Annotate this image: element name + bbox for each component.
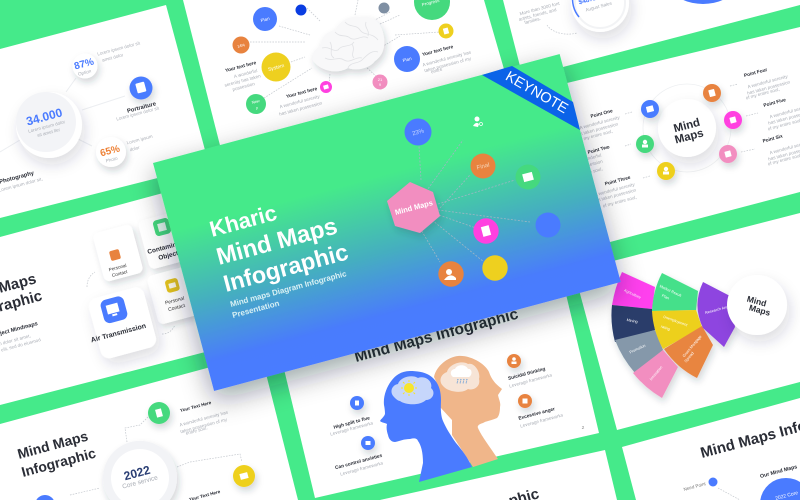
text: your text here right: taken possession of my [424,56,472,73]
ring: 2022: 2022 [122,463,152,483]
text: point four [743,67,791,100]
stat 87%: amet dolor [101,52,124,63]
panel: sales slide top right [503,0,800,76]
arrow: dashed curve [547,25,577,34]
node: orange people [438,261,464,287]
node: magenta icon [473,218,499,244]
text: font artists: families. [524,16,541,25]
subtitle: Presentation [231,299,280,320]
connectors [419,140,530,262]
centre circle: mind maps: Maps [674,127,705,147]
node: pink [372,74,388,90]
circle: mind maps: Maps [748,302,772,318]
icon: magenta point [724,111,742,129]
text: point five [763,97,800,131]
text: font artists: artists, friends, and [518,7,557,22]
panel: 2022 core service slide [0,354,298,500]
text: your text here left: possession [232,81,256,92]
text: your text here bottom: Your text here [286,86,318,100]
text: your text here top: Your Text Here [180,400,212,413]
icon: suicidal [507,354,521,368]
keynote ribbon: KEYNOTE [502,69,571,117]
heading [16,428,98,480]
wedge labels: Innovation [649,365,663,381]
node: yellow [438,24,454,38]
text: point five: Point Five [763,97,787,109]
card: personal contact top [92,224,144,282]
icon: pink point [719,145,737,163]
text: excessive anger [518,406,564,429]
text: point one: Point One [590,108,614,120]
text: font artists: More than 3000 font [519,1,561,16]
wedge labels: Promotion [629,344,646,355]
node: new [246,94,266,114]
card: contaminated object: Object [158,250,180,262]
text: point one: has taken possession [575,121,619,138]
wedge labels: Market Result [659,284,683,298]
wedge labels: Gross Mortgage [682,335,703,358]
panel: main cover slide [153,54,621,391]
icon: anger [518,394,532,408]
node: plan [253,7,277,31]
node: final: Final [476,162,490,172]
label: our mind maps: Our Mind Maps [759,464,798,480]
icon: sun cloud [391,376,433,404]
text: can control: Leverage frameworks [340,460,384,477]
card: air transmission [87,286,158,360]
circle: mind maps [727,275,787,335]
text: point six: Point Six [762,133,784,145]
node: 14%: 14% [237,42,246,49]
text: point four: has taken possession [747,79,791,96]
node: plan: Plan [260,16,271,23]
node: new: New [251,98,260,105]
text: high split: High split to five [333,415,371,431]
hexagon: mind maps [387,182,440,233]
text: excessive anger: Excessive anger [518,406,556,422]
wedge labels: Plan [661,294,670,301]
card: contaminated object: Contaminated [147,238,190,256]
stat 65%: Lorem ipsum [126,134,153,145]
text: can control: Can control anxieties [335,453,383,471]
central circle 34.000: sit amet ller [37,127,61,138]
text: high split: Leverage frameworks [330,420,374,437]
main title [207,200,351,297]
text: point two: entire soul, [580,166,603,177]
icon: green point [636,135,654,153]
text: your text here right: entire [430,67,443,74]
node: blue [536,212,560,238]
node: pink: 21 [378,77,383,82]
text: point three: A wonderful serenity [594,182,636,197]
heading: Mind Maps [16,428,90,462]
text: your text here right: Your text here [422,44,454,58]
text: your text here right [422,44,472,74]
stat 87%: Option [77,68,92,77]
circle: mind maps: Mind [746,294,768,308]
text: your text here right: A wonderful serenity has [422,49,472,67]
text: point two: wonderful [581,153,602,163]
wedge labels: Agriculture [623,288,641,300]
text: your text here left: Your text here [225,60,257,74]
node: yellow [482,255,508,281]
text: your text here top: entire soul. [185,425,208,436]
ring: august sales: August Sales [585,0,613,12]
icon: brain [313,16,384,71]
panel: bottom right slide [622,398,800,500]
wedge labels: Mining [626,318,638,324]
text: your text here bottom [279,86,323,117]
panel: stats slide top left [0,5,209,218]
node: new: y [256,105,258,110]
card: personal contact top: Contact [111,269,129,278]
text: your text here top: A wonderful serenity has [179,409,229,427]
node: need point: Need Point [683,481,707,492]
stat 65%: Photo [105,155,118,164]
text: your text here left: A wonderful [233,68,258,79]
stat 87%: Lorem ipsum dolor sit [97,40,141,57]
text: suicidal thinking: Suicidal thinking [507,366,546,382]
text: point one: A wonderful serenity [579,115,621,130]
node: magenta [320,81,332,93]
card: personal contact right: Personal [164,296,185,306]
icon: green [148,402,170,424]
central circle 34.000: Lorem ipsum dolor [28,119,66,134]
chart: fan wedges [611,272,735,398]
text: point two: Point Two [587,144,610,156]
node: green icon [516,164,540,190]
text: point two [576,144,610,177]
text: point one: of my entire soul, [578,129,613,142]
icon: portraiture [116,76,160,122]
heading: Infographic [20,445,98,480]
icon: portraiture: Lorem ipsum dolor sit [116,105,160,122]
node: plan right: Plan [402,56,413,63]
text: point three [593,175,637,208]
main title: Mind Maps [214,213,340,271]
text: point two: n possession [576,159,604,170]
wedge labels: Spread [684,351,695,363]
node: need point [683,478,740,500]
node: system [262,52,290,82]
text: point three: has taken possession [593,187,637,204]
wedge labels: Research And [705,305,729,315]
text: point four: Point Four [743,67,768,79]
text: point four: of my entire soul, [745,87,780,100]
icon: rain cloud [440,362,479,392]
text: point six [762,133,800,166]
icon: blue [36,495,54,500]
text: your text here left: serenity has taken [224,73,262,88]
icon: user search [473,116,482,127]
node: 14% [232,36,250,54]
wedge labels: rating [660,325,670,332]
text: point three: Point Three [604,175,632,187]
text: your text here bottom: has taken possession [279,100,323,117]
node: 23%: 23% [412,128,425,137]
illustration: blue head [380,371,472,482]
page number: 2 [582,425,585,431]
card: personal contact right: Contact [168,303,186,313]
icon: yellow point [657,162,675,180]
node: progress [414,0,450,20]
text: object mindmaps [0,321,42,359]
subtitle: Mind maps Diagram Infographic [229,269,348,309]
icon: blue point [641,100,659,118]
heading: Mind Maps Infographic [353,306,520,366]
node: 23% [404,118,432,146]
node: plan right [394,46,420,72]
ring: 2022 [103,441,177,500]
text: suicidal thinking [507,366,553,389]
stat 87% [72,40,141,78]
node: system: System [267,63,285,73]
ring: 2022: Core service [122,474,159,491]
stat 65%: dolor [129,145,141,152]
stat 65%: 65% [99,144,121,159]
panel: mind maps point slide right [540,27,800,242]
circle: core [760,478,800,500]
icon: orange point [703,84,721,102]
node: pink: 9 [379,82,382,87]
illustration: tan head [434,356,502,467]
text: your text here top [179,400,229,436]
icon: portraiture: Portraiture [127,101,158,115]
text: point four: A wonderful serenity [747,74,789,89]
wedge labels: Unemployment [663,315,689,328]
main title: Infographic [221,239,351,297]
text: your text here bottom: A wonderful serenity [279,94,321,109]
card: air transmission: Air Transmission [90,323,147,344]
main title: Kharic [207,200,279,242]
panel: bottom centre slide [380,450,617,500]
central circle 34.000 [16,92,82,158]
panel: object mindmaps slide [0,183,240,405]
panel: heads slide [283,290,599,498]
centre circle: mind maps: Mind [672,117,702,135]
keynote ribbon [482,66,580,130]
icon: high split [350,396,364,410]
text: point one [575,108,621,142]
text: excessive anger: Leverage frameworks [520,412,564,429]
node: navy icon [296,4,306,16]
heading [0,270,44,325]
card: personal contact right [146,265,204,325]
stat 65% [96,134,153,167]
panel: brain slide top centre [183,0,510,165]
blue disc [675,0,731,4]
node: final [470,154,496,178]
hexagon: mind maps: Mind Maps [394,198,434,217]
node: grey icon [378,2,390,14]
text: point three: of my entire soul, [602,195,637,208]
ring: august sales [571,0,629,32]
stat 87%: 87% [73,57,95,72]
centre circle: mind maps [658,99,716,157]
central circle 34.000: 34.000 [25,105,64,128]
panel: fan chart slide [570,213,800,430]
text: font artists [518,1,561,25]
card: personal contact top: Personal [108,263,127,272]
text: suicidal thinking: Leverage frameworks [509,372,553,389]
icon: yellow [233,465,255,487]
wedge labels [623,284,729,381]
text: your text here left [224,60,262,92]
card: contaminated object [137,208,201,270]
icon: control [361,436,375,450]
text: your text here top: taken possession of my [180,417,228,434]
